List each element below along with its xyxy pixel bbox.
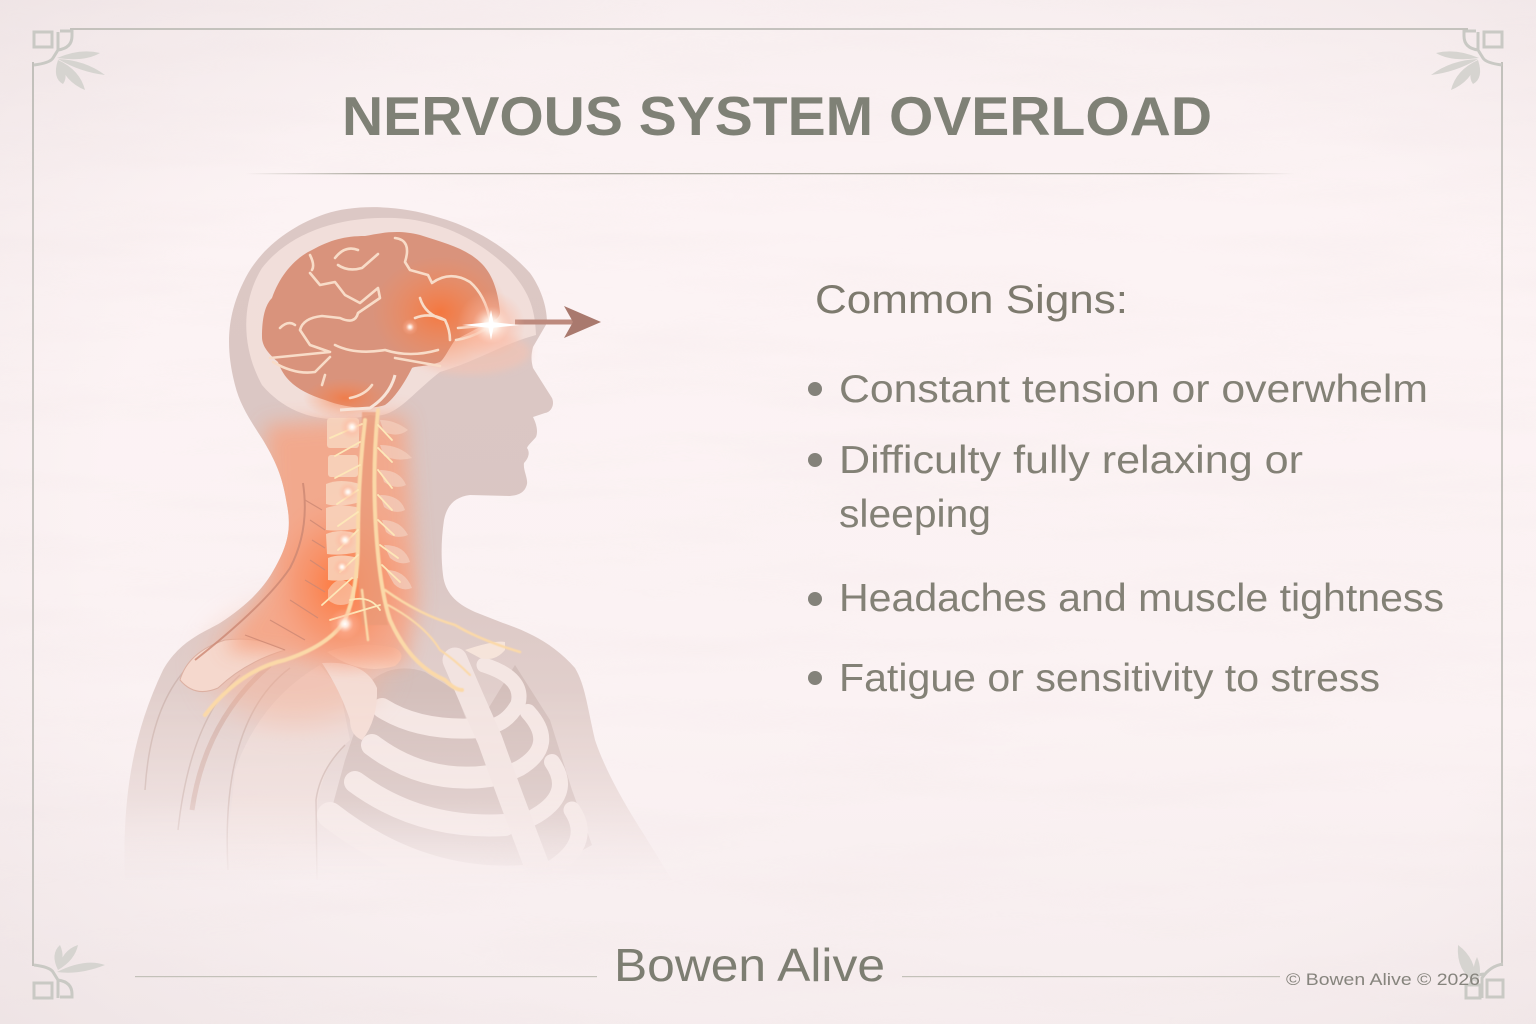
brain bbox=[262, 232, 500, 408]
title rule bbox=[245, 173, 1295, 174]
neck muscle outline bbox=[195, 483, 325, 660]
main nerves bbox=[205, 410, 520, 715]
brainstem bbox=[340, 375, 395, 410]
silhouette: head and torso bbox=[124, 207, 672, 900]
footer rule left bbox=[135, 976, 597, 977]
collar piece bbox=[465, 642, 505, 659]
bullet 2 bbox=[808, 439, 1303, 536]
footer rule right bbox=[902, 976, 1280, 977]
clavicle right bbox=[336, 650, 402, 669]
scapula bbox=[180, 639, 285, 692]
bullet 2: sleeping bbox=[839, 493, 991, 536]
forehead glow bbox=[410, 330, 530, 374]
bullet 4: Fatigue or sensitivity to stress bbox=[839, 657, 1380, 700]
bullet 2: Difficulty fully relaxing or bbox=[839, 439, 1303, 482]
anatomy illustration bbox=[124, 207, 672, 900]
brain folds bbox=[270, 238, 490, 398]
spinal cord bbox=[358, 412, 388, 625]
copyright: © Bowen Alive © 2026 bbox=[1286, 970, 1480, 989]
bullet 1: Constant tension or overwhelm bbox=[839, 368, 1428, 411]
sparkles on spine bbox=[329, 319, 418, 640]
skull lighter band bbox=[246, 218, 536, 419]
heading: common signs: Common Signs: bbox=[815, 278, 1128, 322]
rib cage shadow bbox=[334, 666, 592, 854]
shoulder glow bbox=[205, 605, 385, 725]
arm and shoulder lines bbox=[145, 668, 345, 880]
arm lighter fill bbox=[344, 726, 346, 728]
bullet 3: Headaches and muscle tightness bbox=[839, 577, 1444, 620]
arrow bbox=[515, 306, 601, 338]
vertebrae column bbox=[326, 418, 360, 605]
nerve branches bbox=[322, 424, 400, 620]
neck glow bbox=[225, 415, 420, 680]
brain orange glow bbox=[372, 256, 508, 368]
nerve roots right bbox=[380, 420, 412, 589]
corner ornament: top left bbox=[34, 31, 105, 90]
corner ornament: bottom left bbox=[34, 945, 105, 998]
corner ornament: top right bbox=[1431, 31, 1502, 90]
title: NERVOUS SYSTEM OVERLOAD bbox=[342, 85, 1212, 147]
footer brand: Bowen Alive bbox=[614, 939, 885, 991]
ribs bbox=[330, 665, 579, 879]
shoulder head bbox=[322, 663, 377, 740]
corner ornament: bottom right bbox=[1458, 945, 1503, 998]
forehead spark bbox=[457, 291, 525, 359]
list: signs bbox=[808, 368, 1444, 700]
sternum bbox=[455, 660, 550, 900]
